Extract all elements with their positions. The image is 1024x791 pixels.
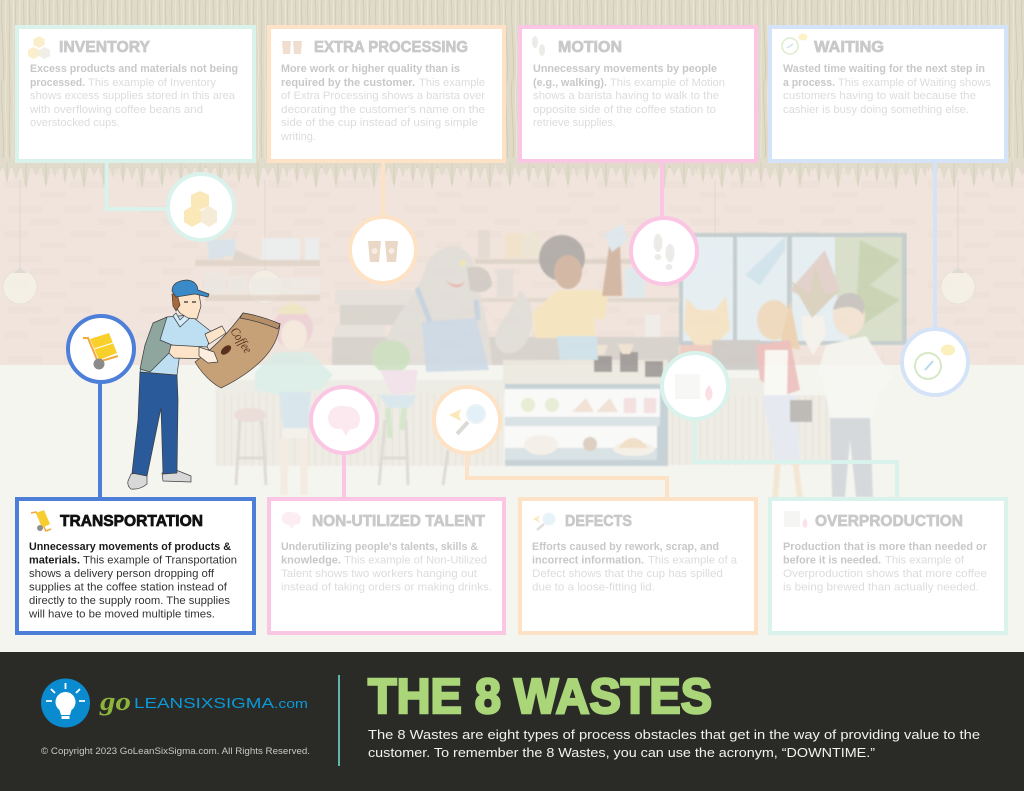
text: waiting description: customers having to wait because the	[783, 90, 976, 102]
panel: extra processing	[269, 27, 504, 161]
cap	[172, 280, 209, 297]
text: non-utilized talent description	[281, 541, 492, 594]
character: delivery person with coffee sack	[128, 280, 280, 489]
hanging lamps	[3, 180, 975, 304]
panel: inventory	[17, 27, 254, 161]
flower vase	[790, 265, 840, 355]
text: extra processing description: writing.	[280, 131, 316, 143]
panel: defects	[520, 499, 756, 633]
footer description: The 8 Wastes are eight types of process obstacles that get in the way of providing value to the	[368, 727, 980, 742]
text: overproduction description: Production that is more than needed or	[783, 541, 987, 553]
text: inventory description: with overflowing coffee beans and	[29, 104, 203, 116]
shoes	[128, 473, 147, 489]
sack label: Coffee	[228, 324, 256, 356]
logo wordmark: .com	[274, 696, 308, 711]
text: overproduction description: Overproduction shows that more coffee	[783, 568, 987, 580]
text: defects description: incorrect information.	[532, 554, 644, 566]
hand	[199, 347, 218, 363]
background: thatched roof	[0, 0, 1024, 192]
panel: waiting	[770, 27, 1006, 161]
stool seat	[234, 408, 266, 422]
text: motion description: (e.g., walking).	[533, 77, 607, 89]
icon circle: overproduction	[662, 353, 728, 419]
text: transportation description: will have to be moved multiple times.	[28, 608, 215, 620]
footer description: customer. To remember the 8 Wastes, you can use the acronym, “DOWNTIME.”	[368, 745, 875, 760]
icon: clock and speech bubble	[782, 34, 808, 54]
character: man in white shirt	[816, 293, 892, 497]
logo wordmark	[99, 687, 308, 716]
connector lines	[100, 162, 935, 497]
stools	[236, 420, 448, 485]
coffee machine	[335, 290, 413, 337]
shirt	[140, 315, 213, 375]
text: defects description: due to a loose-fitting lid.	[532, 582, 655, 594]
footer description	[368, 727, 980, 760]
text: inventory description: processed.	[30, 77, 85, 89]
character: manatee in overalls	[385, 246, 532, 372]
text: waiting description: Wasted time waiting for the next step in	[783, 63, 985, 75]
text: overproduction description: before it is needed.	[783, 554, 881, 566]
text: transportation description: This example of Transportation	[83, 554, 237, 566]
text: overproduction description: is being brewed than actually needed.	[783, 582, 979, 594]
heading: motion: MOTION	[558, 39, 622, 56]
logo wordmark: go	[99, 687, 131, 716]
text: defects description: Efforts caused by rework, scrap, and	[532, 541, 719, 553]
text: non-utilized talent description: knowledge.	[281, 554, 341, 566]
logo wordmark: LEANSIXSIGMA	[134, 695, 274, 712]
text: non-utilized talent description: instead of taking orders or making drinks.	[281, 582, 492, 594]
icon: two cups	[282, 41, 302, 54]
text: overproduction description	[783, 541, 987, 594]
text: inventory description	[29, 63, 238, 129]
text: non-utilized talent description: This example of Non-Utilized	[344, 554, 487, 566]
heading: inventory: INVENTORY	[59, 39, 151, 56]
character: green frog	[372, 340, 418, 438]
coffee pots	[592, 344, 663, 377]
heading: non-utilized talent: NON-UTILIZED TALENT	[312, 513, 486, 530]
heading: defects: DEFECTS	[565, 513, 632, 530]
divider	[338, 675, 340, 766]
character: pink-haired waitress	[255, 302, 333, 495]
icon: footprints	[532, 36, 545, 56]
text: extra processing description	[280, 63, 485, 143]
background: cafe wall	[0, 150, 1024, 365]
icon: cubes	[28, 36, 50, 59]
icon circle: non-utilized talent	[311, 387, 377, 453]
text: extra processing description: of Extra Processing shows a barista over	[281, 90, 485, 102]
text: motion description: shows a barista having to walk to the	[533, 90, 719, 102]
text: waiting description	[783, 63, 991, 116]
display case	[503, 360, 668, 466]
faded cafe scene	[195, 224, 907, 498]
text: transportation description: materials.	[29, 554, 80, 566]
coffee sack	[195, 313, 280, 388]
text: overproduction description: This example of	[885, 554, 964, 566]
text: transportation description: supplies at the coffee station instead of	[29, 582, 227, 594]
text: waiting description: cashier is busy doing something else.	[783, 104, 969, 116]
panel: motion	[520, 27, 756, 161]
back shelves and items	[195, 230, 680, 343]
front bar	[215, 378, 833, 466]
text: inventory description: shows excess supplies stored in this area	[30, 90, 235, 102]
text: defects description: This example of a	[648, 554, 737, 566]
text: non-utilized talent description: Talent shows two workers hanging out	[281, 568, 477, 580]
head	[175, 294, 201, 319]
title: THE 8 WASTES	[368, 670, 712, 724]
trousers	[132, 372, 178, 476]
icon circle: transportation	[68, 316, 134, 382]
text: inventory description: overstocked cups.	[30, 117, 120, 129]
heading: waiting: WAITING	[814, 39, 884, 56]
copyright: © Copyright 2023 GoLeanSixSigma.com. All Rights Reserved.	[41, 746, 310, 757]
text: defects description: Defect shows that the cup has spilled	[532, 568, 723, 580]
icon: magnifier	[533, 513, 555, 530]
character: woman with cardigan	[756, 300, 812, 498]
icon: brain	[282, 512, 301, 529]
character: barista with afro	[533, 224, 628, 360]
icon circle: defects	[434, 387, 500, 453]
panel: overproduction	[770, 499, 1006, 633]
text: extra processing description: This example	[419, 77, 485, 89]
heading: overproduction: OVERPRODUCTION	[815, 513, 963, 530]
text: transportation description: Unnecessary movements of products &	[29, 541, 231, 553]
icon circle: inventory	[168, 174, 234, 240]
face	[184, 301, 196, 303]
window	[679, 233, 907, 345]
heading: transportation: TRANSPORTATION	[60, 513, 203, 530]
text: transportation description: directly to the supply room. The supplies	[29, 595, 230, 607]
logo icon: light bulb	[41, 678, 90, 728]
text: defects description	[532, 541, 737, 594]
text: transportation description	[28, 541, 237, 620]
text: waiting description: a process.	[783, 77, 835, 89]
text: motion description: opposite side of the coffee station to	[533, 104, 716, 116]
icon circle: extra processing	[350, 217, 416, 283]
text: non-utilized talent description: Underutilizing people's talents, skills &	[281, 541, 478, 553]
dark back counter	[332, 337, 679, 365]
panel: non-utilized talent	[269, 499, 504, 633]
text: inventory description: Excess products and materials not being	[30, 63, 238, 75]
character: fox cashier	[680, 296, 760, 370]
text: motion description: Unnecessary movements by people	[533, 63, 717, 75]
icon circle: waiting	[902, 329, 968, 395]
icon: hand truck	[31, 510, 51, 531]
arms	[169, 345, 212, 359]
text: transportation description: shows a delivery person dropping off	[29, 568, 214, 580]
icon circle: motion	[631, 218, 697, 284]
text: motion description	[533, 63, 725, 129]
footer band	[0, 652, 1024, 791]
text: extra processing description: More work or higher quality than is	[281, 63, 460, 75]
text: motion description: This example of Motion	[610, 77, 725, 89]
panel: transportation	[17, 499, 254, 633]
icon: cups and drop	[784, 511, 808, 528]
background: floor	[0, 365, 1024, 652]
text: extra processing description: required by the customer.	[281, 77, 415, 89]
text: extra processing description: decorating the customer's name on the	[281, 104, 485, 116]
text: inventory description: This example of Inventory	[88, 77, 217, 89]
text: extra processing description: side of the cup instead of using simple	[281, 117, 478, 129]
text: waiting description: This example of Waiting shows	[838, 77, 991, 89]
text: motion description: retrieve supplies.	[533, 117, 616, 129]
heading: extra processing: EXTRA PROCESSING	[314, 39, 468, 56]
